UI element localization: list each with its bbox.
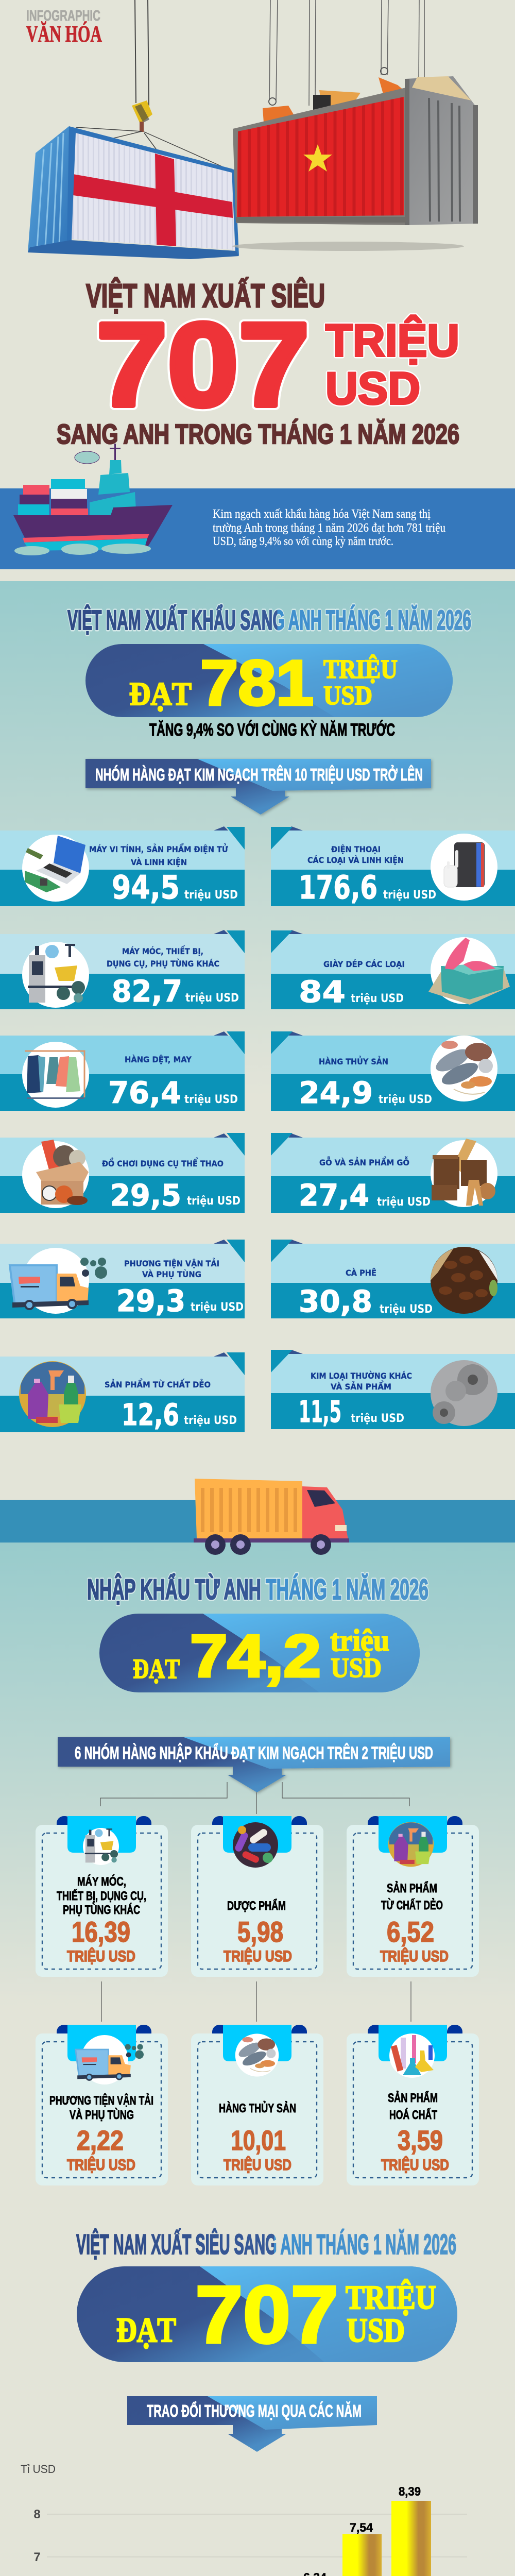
card: wood: triệu USD (377, 1196, 431, 1209)
card: sports toys: triệu USD (187, 1195, 241, 1208)
export value labels: 7,54 (350, 2521, 373, 2535)
import card: pharmaceuticals: TRIỆU USD (224, 1947, 292, 1965)
figure pill: đạt 74,2 triệu USD: 74,2 (190, 1622, 321, 1689)
illustration: Vietnam flag container hanging from crane (232, 0, 478, 251)
import card: seafood (191, 2025, 323, 2185)
import card: seafood: HÀNG THỦY SẢN (219, 2100, 296, 2115)
intro band (0, 488, 515, 569)
icon: sports box (22, 1140, 89, 1208)
card: footwear: 84 (299, 974, 346, 1009)
card: textiles: triệu USD (184, 1093, 238, 1106)
figure pill: đạt 781 triệu USD: TRIỆU (323, 654, 398, 684)
import card: vehicles: TRIỆU USD (67, 2156, 135, 2174)
icon: truck (10, 1258, 107, 1310)
import card: chemicals (347, 2025, 479, 2185)
import card: plastics: TỪ CHẤT DẺO (381, 1897, 443, 1912)
import card: seafood: TRIỆU USD (224, 2156, 291, 2174)
icon: machine (28, 944, 85, 1003)
card: coffee: CÀ PHÊ (346, 1268, 376, 1278)
icon: plastic bottles (19, 1361, 86, 1427)
figure pill: đạt 74,2 triệu USD: USD (331, 1652, 382, 1683)
banner arrow: import groups (58, 1737, 450, 1792)
figure pill: đạt 74,2 triệu USD: ĐẠT (133, 1653, 180, 1684)
road band (0, 1500, 515, 1543)
card: machinery: DỤNG CỤ, PHỤ TÙNG KHÁC (107, 959, 219, 969)
illustration: England flag container hanging from crane (28, 0, 239, 259)
headline figure: 707 triệu USD: 707 (96, 298, 310, 431)
card: phones: ĐIỆN THOẠI (331, 844, 381, 854)
card: phones: 176,6 (299, 869, 377, 906)
figure pill: đạt 781 triệu USD (85, 644, 453, 719)
card: sports toys: 29,5 (110, 1178, 181, 1213)
import card: plastics: SẢN PHẨM (387, 1880, 437, 1895)
card: seafood: HÀNG THỦY SẢN (319, 1056, 388, 1066)
card: vehicles: PHƯƠNG TIỆN VẬN TẢI (124, 1258, 219, 1268)
import card: plastics: TRIỆU USD (380, 1947, 449, 1965)
card: plastics: 12,6 (122, 1397, 179, 1432)
icon: fish (235, 2033, 279, 2077)
card: coffee: 30,8 (299, 1284, 372, 1319)
icon: shoes and box (428, 937, 510, 1005)
icon: capsules (233, 1822, 278, 1868)
card: metals: VÀ SẢN PHẨM (331, 1380, 391, 1392)
growth note: TĂNG 9,4% SO VỚI CÙNG KỲ NĂM TRƯỚC (149, 720, 395, 740)
import card: machinery: TRIỆU USD (67, 1947, 135, 1965)
export bars (96, 2501, 481, 2576)
card: wood: 27,4 (299, 1178, 369, 1213)
import card: pharmaceuticals: 5,98 (237, 1916, 283, 1948)
card: sports toys: ĐỒ CHƠI DỤNG CỤ THỂ THAO (102, 1157, 224, 1168)
icon: coffee beans (431, 1247, 497, 1314)
card: textiles: 76,4 (108, 1075, 181, 1110)
card: seafood (271, 1031, 515, 1111)
card: vehicles: VÀ PHỤ TÙNG (142, 1269, 201, 1279)
intro text: USD, tăng 9,4% so với cùng kỳ năm trước. (213, 535, 393, 548)
export value labels: 8,39 (399, 2485, 421, 2499)
card: metals: KIM LOẠI THƯỜNG KHÁC (311, 1371, 412, 1381)
card: footwear (271, 930, 515, 1009)
banner arrow: export groups (85, 759, 431, 815)
icon: lab flasks (389, 2033, 435, 2078)
import card: pharmaceuticals: DƯỢC PHẨM (227, 1899, 286, 1913)
import card: vehicles: PHƯƠNG TIỆN VẬN TẢI (49, 2093, 153, 2108)
card: coffee (271, 1240, 515, 1319)
import card: vehicles: 2,22 (77, 2125, 124, 2156)
import card: chemicals: 3,59 (398, 2125, 443, 2156)
import card: chemicals: HOÁ CHẤT (389, 2108, 437, 2122)
figure pill: đạt 74,2 triệu USD: triệu (330, 1623, 389, 1657)
headline figure: 707 triệu USD: TRIỆU (325, 315, 459, 366)
card: footwear: GIÀY DÉP CÁC LOẠI (323, 959, 405, 969)
icon: cargo ship (13, 444, 173, 555)
y axis labels: 8 (33, 2507, 41, 2521)
figure pill: đạt 707 triệu USD: 707 (195, 2269, 338, 2360)
card: metals: 11,5 (299, 1394, 341, 1429)
card: machinery: triệu USD (185, 992, 239, 1005)
card: machinery: MÁY MÓC, THIẾT BỊ, (122, 945, 203, 956)
y axis labels: 7 (33, 2550, 41, 2564)
figure pill: đạt 781 triệu USD: 781 (200, 648, 314, 719)
card: plastics: triệu USD (184, 1414, 237, 1427)
icon: delivery truck (194, 1479, 349, 1555)
banner arrow: trade over the years: TRAO ĐỔI THƯƠNG MẠI QUA CÁC NĂM (147, 2401, 362, 2420)
logo: Infographic Văn Hóa: VĂN HÓA (26, 21, 102, 47)
card: machinery (0, 930, 245, 1009)
import card: vehicles: VÀ PHỤ TÙNG (70, 2108, 134, 2122)
card: textiles: HÀNG DỆT, MAY (125, 1054, 192, 1064)
headline figure: 707 triệu USD: USD (325, 363, 420, 414)
card: phones (271, 826, 515, 906)
figure pill: đạt 707 triệu USD: TRIỆU (346, 2279, 436, 2316)
card: footwear: triệu USD (351, 992, 404, 1005)
icon: truck (76, 2044, 144, 2081)
card: vehicles: 29,3 (116, 1283, 185, 1318)
import card: seafood: 10,01 (231, 2125, 286, 2156)
import card: plastics (347, 1816, 479, 1977)
card: seafood: triệu USD (379, 1093, 432, 1106)
import card: machinery: THIẾT BỊ, DỤNG CỤ, (57, 1889, 146, 1903)
panel: imports from UK (0, 1479, 515, 2006)
card: textiles (0, 1031, 245, 1111)
card: computers: VÀ LINH KIỆN (131, 857, 187, 867)
import card: chemicals: SẢN PHẨM (388, 2090, 438, 2105)
intro text: trường Anh trong tháng 1 năm 2026 đạt hơn 781 triệu (213, 521, 445, 535)
card: phones: CÁC LOẠI VÀ LINH KIỆN (307, 855, 404, 865)
figure pill: đạt 781 triệu USD: ĐẠT (129, 675, 192, 712)
icon: timber (431, 1139, 497, 1207)
card: machinery: 82,7 (112, 974, 182, 1009)
headline figure: 707 triệu USD (96, 298, 459, 431)
card: phones: triệu USD (383, 889, 436, 902)
figure pill: đạt 707 triệu USD: ĐẠT (116, 2310, 176, 2349)
figure pill: đạt 74,2 triệu USD (99, 1614, 420, 1692)
connector lines to import cards (100, 1782, 411, 2022)
card: sports toys (0, 1133, 245, 1213)
icon: plastic bottles (388, 1822, 434, 1867)
import card: machinery: 16,39 (72, 1916, 130, 1948)
import card: plastics: 6,52 (387, 1916, 434, 1948)
export value labels (103, 2485, 421, 2576)
icon: phone and earbuds (431, 834, 497, 901)
headline figure: 707 triệu USD: TRIỆU (325, 315, 459, 366)
card: plastics: SẢN PHẨM TỪ CHẤT DẺO (105, 1378, 211, 1389)
intro text (213, 507, 445, 548)
figure pill: đạt 707 triệu USD (77, 2266, 457, 2362)
icon: gears (431, 1360, 497, 1426)
title: Việt Nam xuất siêu: VIỆT NAM XUẤT SIÊU (86, 277, 325, 314)
card: seafood: 24,9 (299, 1075, 373, 1110)
card: coffee: triệu USD (380, 1303, 433, 1316)
banner arrow: trade over the years (127, 2396, 377, 2452)
card: vehicles: triệu USD (191, 1301, 244, 1314)
import card: pharmaceuticals (191, 1816, 323, 1977)
import card: machinery: MÁY MÓC, (77, 1874, 126, 1889)
panel: Vietnam exports to UK (0, 581, 515, 1041)
card: vehicles (0, 1240, 245, 1318)
card: wood (271, 1133, 515, 1213)
import card: chemicals: TRIỆU USD (381, 2156, 449, 2174)
icon: machine (85, 1828, 118, 1862)
card: computers (0, 826, 245, 906)
card: computers: triệu USD (184, 889, 238, 902)
import card: vehicles (36, 2025, 168, 2185)
icon: clothes rack (22, 1042, 89, 1108)
import card: machinery: PHỤ TÙNG KHÁC (63, 1903, 140, 1917)
card: metals: triệu USD (351, 1412, 404, 1425)
headline figure: 707 triệu USD: 707 (96, 298, 310, 431)
import card: machinery (36, 1816, 168, 1977)
headline figure: 707 triệu USD: USD (325, 363, 420, 414)
card: plastics (0, 1352, 245, 1432)
card: wood: GỖ VÀ SẢN PHẨM GỖ (319, 1156, 409, 1167)
figure pill: đạt 707 triệu USD: USD (347, 2312, 405, 2349)
card: computers: MÁY VI TÍNH, SẢN PHẨM ĐIỆN TỬ (89, 843, 229, 854)
icon: fish (431, 1036, 497, 1101)
icon: laptop (22, 835, 89, 902)
intro text: Kim ngạch xuất khẩu hàng hóa Việt Nam sang thị (213, 507, 431, 521)
logo: Infographic Văn Hóa: INFOGRAPHIC (26, 8, 100, 24)
logo: Infographic Văn Hóa (26, 8, 102, 47)
bar chart: trade by year (21, 2463, 492, 2576)
y axis labels (33, 2507, 41, 2576)
card: computers: 94,5 (112, 869, 180, 906)
figure pill: đạt 781 triệu USD: USD (323, 681, 372, 710)
card: metals (271, 1350, 515, 1429)
axis unit label: Tỉ USD (21, 2463, 56, 2476)
